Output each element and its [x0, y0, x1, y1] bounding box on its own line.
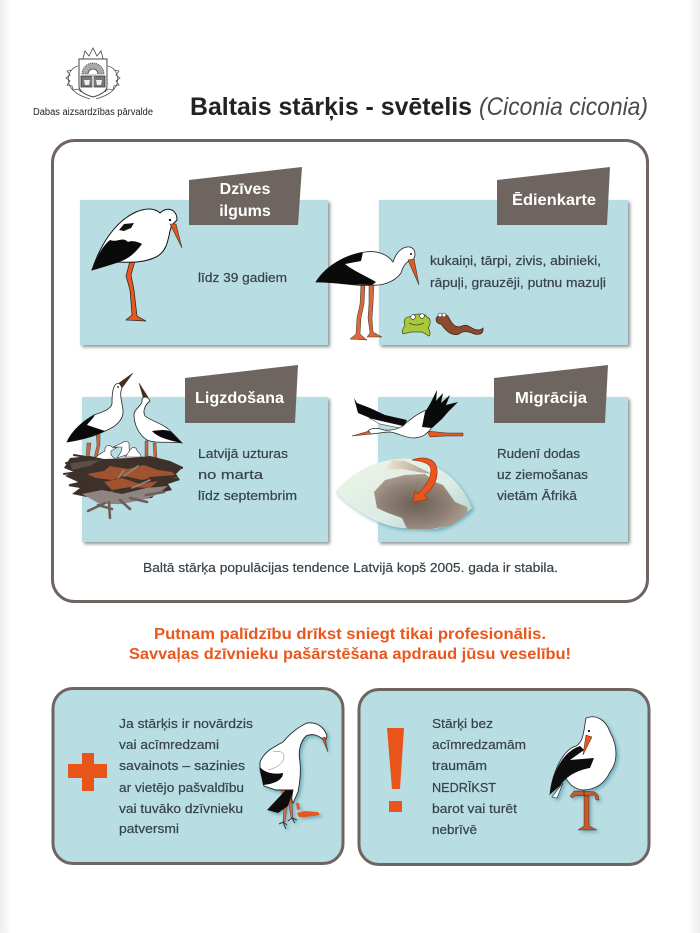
heading: Ēdienkarte — [512, 190, 596, 209]
advice text — [119, 716, 254, 836]
heading tag — [185, 365, 298, 423]
text — [198, 446, 297, 503]
panel: main frame — [52, 140, 648, 602]
advice text: ar vietējo pašvaldību — [119, 780, 244, 795]
warning text: barot vai turēt — [432, 801, 517, 816]
heading: ilgums — [219, 203, 271, 220]
panel: injured stork advice — [53, 688, 343, 864]
heading: Dzīves — [220, 181, 270, 198]
card background — [80, 200, 328, 345]
warning text: Savvaļas dzīvnieku pašārstēšana apdraud jūsu veselību! — [129, 646, 571, 663]
text: līdz 39 gadiem — [198, 270, 287, 285]
card background — [53, 688, 343, 864]
icon: exclamation mark — [387, 728, 404, 812]
text: uz ziemošanas — [497, 467, 589, 482]
text — [497, 446, 589, 503]
icon: nest with storks — [64, 373, 183, 518]
icon: standing stork — [92, 209, 182, 321]
route arrow — [412, 458, 437, 502]
warning text: Stārķi bez — [432, 716, 493, 731]
title: latin name: (Ciconia ciconia) — [479, 93, 648, 121]
warning text: nebrīvē — [432, 822, 477, 837]
icon: globe with route arrow — [335, 458, 472, 529]
card background — [359, 690, 649, 864]
population note: Baltā stārķa populācijas tendence Latvijā kopš 2005. gada ir stabila. — [143, 560, 558, 575]
card background — [378, 397, 628, 542]
card background — [82, 397, 328, 542]
panel: lifespan — [80, 167, 328, 345]
icon: stork — [316, 247, 419, 340]
warning text: acīmredzamām — [432, 737, 526, 752]
text: Latvijā uzturas — [198, 446, 289, 461]
heading tag — [494, 365, 608, 423]
advice text: vai acīmredzami — [119, 737, 219, 752]
icon: coat of arms — [66, 48, 120, 99]
icon: injured stork — [260, 723, 328, 829]
heading: Ligzdošana — [195, 390, 284, 407]
heading: Migrācija — [515, 390, 587, 407]
text: rāpuļi, grauzēji, putnu mazuļi — [430, 275, 606, 290]
organisation name: Dabas aizsardzības pārvalde — [33, 107, 153, 118]
panel: do not feed — [359, 690, 649, 864]
text: līdz septembrim — [198, 488, 297, 503]
text — [430, 253, 606, 290]
title: Baltais stārķis - svētelis — [190, 93, 472, 121]
warning text — [432, 716, 526, 837]
panel: diet — [316, 167, 628, 345]
panel: migration — [335, 365, 628, 542]
warning text: NEDRĪKST — [432, 780, 496, 795]
text: Rudenī dodas — [497, 446, 581, 461]
advice text: savainots – sazinies — [119, 758, 246, 773]
advice text: Ja stārķis ir novārdzis — [119, 716, 254, 731]
logo: Dabas aizsardzības pārvalde — [33, 48, 153, 118]
warning text: traumām — [432, 758, 487, 773]
heading — [219, 181, 271, 220]
heading tag — [497, 167, 610, 225]
advice text: vai tuvāko dzīvnieku — [119, 801, 243, 816]
icon: worm — [436, 313, 483, 335]
warning text — [129, 626, 571, 663]
heading tag — [189, 167, 302, 225]
icon: stork on one leg — [550, 717, 616, 830]
card background — [379, 200, 628, 345]
text: no marta — [198, 467, 264, 482]
warning text: Putnam palīdzību drīkst sniegt tikai profesionālis. — [154, 626, 546, 643]
advice text: patversmi — [119, 821, 179, 836]
panel: nesting — [64, 365, 328, 542]
icon: first aid cross — [68, 753, 107, 791]
text: vietām Āfrikā — [497, 488, 578, 503]
text: kukaiņi, tārpi, zivis, abinieki, — [430, 253, 601, 268]
icon: flying stork — [352, 390, 463, 438]
icon: frog — [402, 314, 430, 336]
